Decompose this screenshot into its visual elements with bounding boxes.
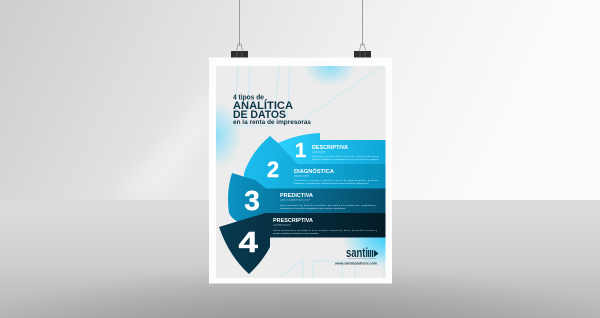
text descriptiva: ayuda a entender el rendimiento actual y pasado de tu negocio. <box>312 158 379 161</box>
heading prescriptiva: PRESCRIPTIVA <box>273 218 313 224</box>
poster sheet <box>209 58 392 284</box>
title: 4 tipos de <box>233 92 264 102</box>
wall <box>0 0 600 200</box>
title <box>233 92 312 126</box>
text prescriptiva: ¿Qué debemos hacer? <box>273 224 292 226</box>
text diagnostica <box>294 174 379 185</box>
title: en la renta de impresoras <box>233 120 312 126</box>
band 3 <box>228 173 386 222</box>
text predictiva: recogiendo de la analítica diagnóstica para predecir tendencias. <box>280 207 346 210</box>
artwork background <box>216 66 386 278</box>
text descriptiva <box>312 150 380 161</box>
number 2: 2 <box>267 157 279 182</box>
poster artwork <box>216 66 386 278</box>
glow accents and line pattern <box>216 66 386 278</box>
wires and binder clips <box>231 0 371 61</box>
heading descriptiva: DESCRIPTIVA <box>312 145 348 151</box>
band 2 <box>244 136 386 188</box>
number 1: 1 <box>295 140 306 162</box>
text predictiva: Toma como base los datos de la analítica descriptiva y las tendencias, apoyándote y <box>280 204 377 207</box>
light beam on wall <box>136 128 196 190</box>
text prescriptiva: ponerlas en práctica para obtener los mejores resultados. <box>273 232 319 235</box>
floor <box>0 200 600 318</box>
band 1 <box>278 133 386 164</box>
text descriptiva: ¿Qué ha ocurrido? <box>312 150 326 154</box>
number 4: 4 <box>238 226 258 258</box>
number 3: 3 <box>244 185 260 216</box>
heading predictiva: PREDICTIVA <box>280 193 313 199</box>
logo santi: santi <box>346 246 368 260</box>
website url: www.santisolutions.com <box>334 262 377 266</box>
text diagnostica: Profundiza, investiga e identifica causas de algún problema, patrones, <box>294 179 379 182</box>
text predictiva: ¿Qué es probable que ocurra? <box>280 198 311 202</box>
text diagnostica: tendencias y correlaciones. Información para tomar decisiones y diagnóstico. <box>294 182 369 185</box>
band 4 <box>219 213 386 274</box>
text descriptiva: Resumen y analiza datos históricos. Información que te <box>312 155 380 158</box>
title: DE DATOS <box>233 109 286 121</box>
text prescriptiva: Utiliza herramientas tecnológicas para recopilar información, datos, desarrollar acciones y <box>273 229 378 232</box>
text predictiva <box>280 198 377 210</box>
text prescriptiva <box>273 224 378 235</box>
title: ANALÍTICA <box>233 99 293 112</box>
heading diagnostica: DIAGNÓSTICA <box>294 167 334 175</box>
text diagnostica: ¿Por qué ha ocurrido? <box>294 174 310 178</box>
